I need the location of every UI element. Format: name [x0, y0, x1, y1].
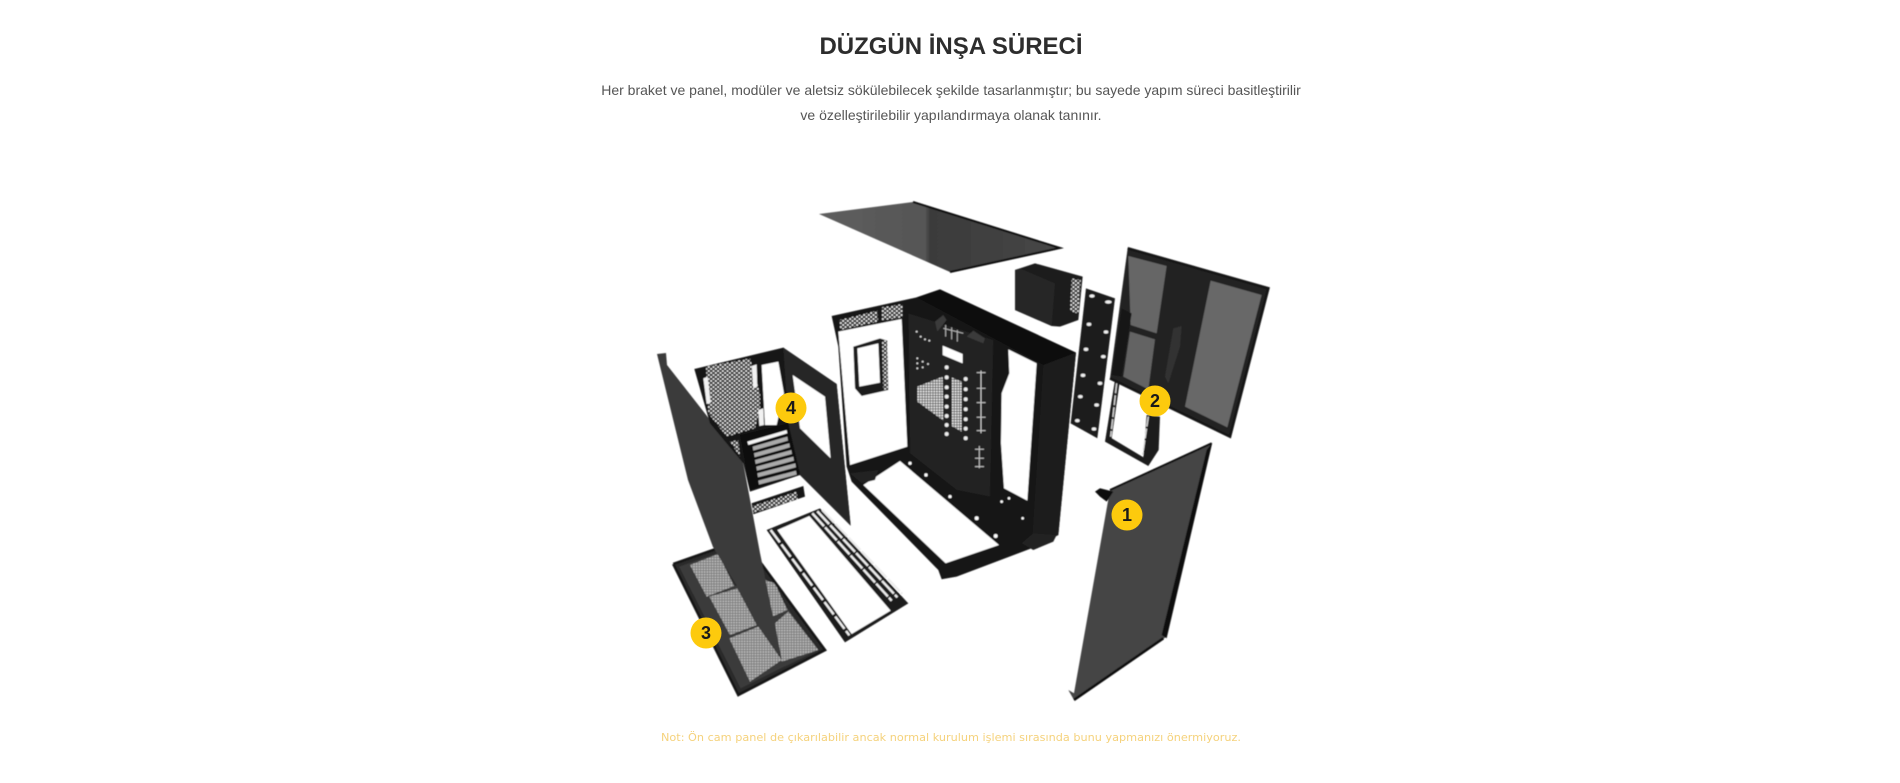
panel 2: side mesh panel and bracket: [1105, 248, 1268, 466]
top glass panel: [819, 202, 1060, 272]
description text: ve özelleştirilebilir yapılandırmaya olanak tanınır.: [800, 107, 1102, 123]
badge 3: [690, 618, 722, 648]
panel 1: front mesh door: [1068, 443, 1212, 700]
description text: Her braket ve panel, modüler ve aletsiz sökülebilecek şekilde tasarlanmıştır; bu sayede yapım süreci basitleştirilir: [601, 82, 1301, 98]
dust filter frame: [767, 508, 908, 642]
panel 4: rear bracket: [694, 348, 851, 526]
badge 3: 3: [701, 623, 711, 643]
badge 1: 1: [1122, 505, 1132, 525]
badge 2: [1140, 386, 1170, 416]
main chassis: [832, 289, 1076, 579]
badge 4: 4: [786, 398, 796, 418]
footnote: Not: Ön cam panel de çıkarılabilir ancak normal kurulum işlemi sırasında bunu yapmanızı önermiyoruz.: [661, 731, 1241, 744]
side glass panel: [657, 353, 782, 660]
perforated bracket strip: [1071, 288, 1115, 438]
badge 2: 2: [1150, 391, 1160, 411]
fan box module: [1015, 263, 1083, 327]
panel 3: bottom mesh filter: [673, 539, 825, 695]
description text: [601, 82, 1301, 123]
title: DÜZGÜN İNŞA SÜRECİ: [819, 33, 1083, 60]
badge 4: [776, 392, 806, 424]
badge 1: [1112, 500, 1142, 530]
